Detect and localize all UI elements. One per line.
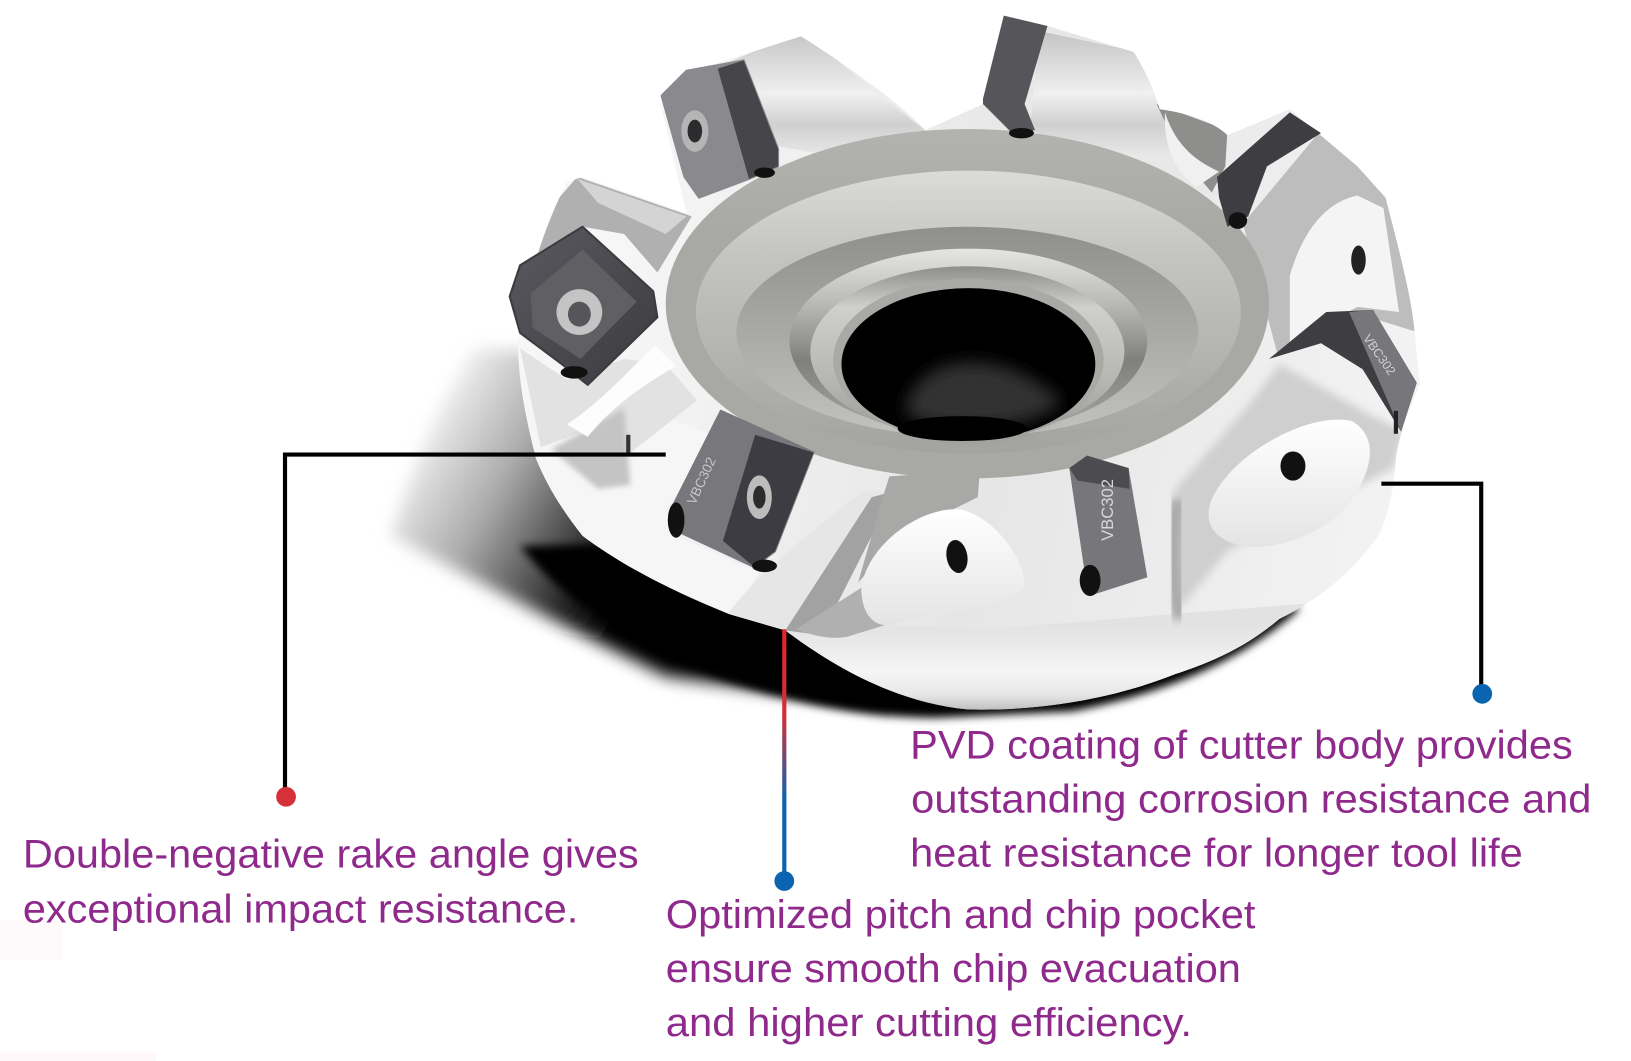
leader line: PVD coating (1381, 484, 1492, 704)
body silhouette (499, 0, 1435, 728)
side flute shadow (1174, 499, 1180, 619)
insert marking: VBC302 (1360, 332, 1398, 378)
callout: chip pocket (666, 893, 1255, 1045)
light streak by left insert (567, 345, 676, 437)
insert marking: VBC302 (1098, 479, 1117, 541)
leader line: rake angle (276, 455, 666, 807)
left tooth back (525, 177, 692, 273)
left side wall (536, 457, 734, 616)
callout: rake angle: Double-negative rake angle gives (23, 833, 639, 877)
callout: chip pocket: Optimized pitch and chip pocket (666, 893, 1255, 937)
outer rim (666, 129, 1269, 478)
top face rings (666, 129, 1269, 478)
callout: rake angle: exceptional impact resistance. (23, 888, 578, 932)
insert: front center (1069, 456, 1147, 596)
left notch (551, 408, 630, 489)
lower rim (728, 603, 1311, 718)
background tint (0, 921, 156, 1061)
flute front (728, 470, 980, 638)
callout: PVD coating (910, 723, 1591, 875)
drop shadow under cutter (391, 348, 1300, 718)
insert: front left (668, 411, 813, 572)
ring: outer band (696, 171, 1241, 454)
callout: rake angle (23, 833, 639, 932)
insert: upper right (1217, 112, 1321, 229)
callout: PVD coating: heat resistance for longer tool life (910, 831, 1523, 875)
insert marking: VBC302 (684, 455, 719, 507)
insert: top (983, 16, 1047, 138)
right side shade (1175, 364, 1404, 614)
pocket right (1209, 420, 1370, 547)
upper gray tooth backs (730, 36, 925, 152)
callout: chip pocket: ensure smooth chip evacuation (666, 947, 1241, 991)
insert: right (1269, 310, 1417, 434)
callout: chip pocket: and higher cutting efficiency. (666, 1001, 1192, 1045)
ring: middle band (736, 227, 1198, 437)
ring: inner step (789, 249, 1147, 434)
hole upper right (1351, 245, 1366, 275)
callout: PVD coating: PVD coating of cutter body provides (910, 723, 1573, 767)
center bore (842, 288, 1095, 441)
leader line: chip pocket (774, 629, 794, 891)
cutter body (499, 0, 1435, 728)
insert: left (510, 227, 657, 385)
insert: top left (662, 60, 778, 198)
pocket front (861, 509, 1025, 625)
callout: PVD coating: outstanding corrosion resistance and (911, 777, 1591, 821)
